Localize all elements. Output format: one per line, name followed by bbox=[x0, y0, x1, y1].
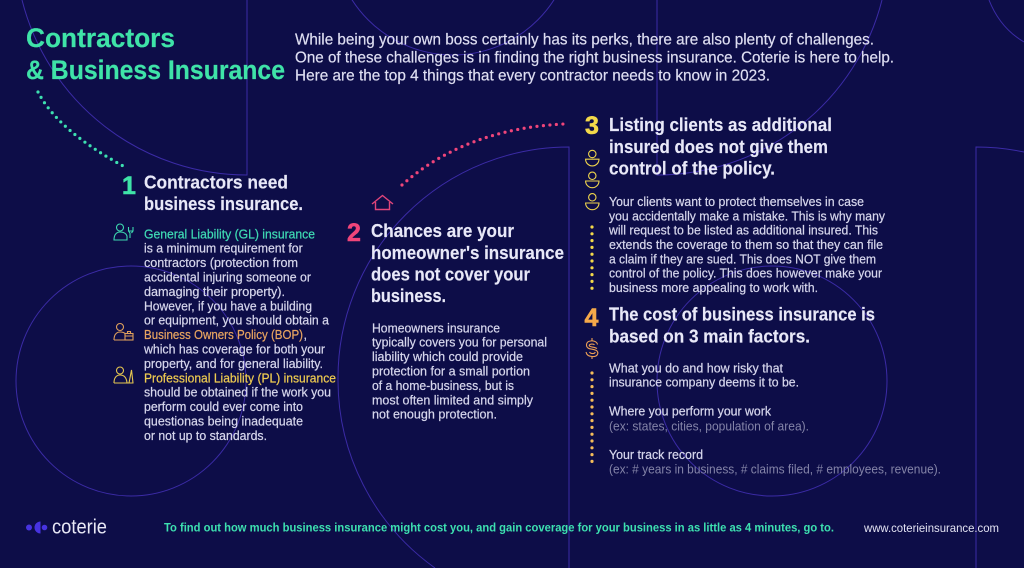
text block: insurance types: accidental injuring someone or bbox=[144, 270, 312, 284]
text block: additional insured: a claim if they are sued. This does NOT give them bbox=[609, 251, 876, 266]
panel: item 4 cost factors bbox=[584, 304, 941, 476]
text block: homeowners insurance: liability which could provide bbox=[372, 349, 523, 364]
number 4: 4 bbox=[584, 304, 598, 332]
title bbox=[26, 23, 285, 85]
heading 4 bbox=[609, 305, 875, 346]
text block: cost factors: (ex: states, cities, population of area). bbox=[609, 418, 809, 433]
heading 1: business insurance. bbox=[144, 194, 303, 214]
text block: insurance types: damaging their property). bbox=[144, 284, 285, 299]
text block: insurance types: questionas being inadequate bbox=[144, 414, 303, 428]
heading 1: Contractors need bbox=[144, 172, 288, 192]
heading 3 bbox=[609, 115, 832, 178]
text block: additional insured: extends the coverage to them so that they can file bbox=[609, 237, 883, 252]
icon: three clients bbox=[586, 150, 599, 210]
icon: logo mark bbox=[26, 522, 47, 534]
text block: cost factors: Where you perform your work bbox=[609, 404, 772, 419]
heading 4: based on 3 main factors. bbox=[609, 326, 810, 346]
icon: business owner person with briefcase bbox=[114, 324, 133, 340]
number 1: 1 bbox=[122, 172, 136, 200]
number 2: 2 bbox=[347, 219, 361, 247]
logo: coterie bbox=[26, 516, 107, 538]
arrow: green dotted line from title to item 1 bbox=[38, 92, 125, 167]
text block: insurance types: However, if you have a building bbox=[144, 298, 312, 313]
heading 3: Listing clients as additional bbox=[609, 115, 832, 135]
text block: additional insured bbox=[608, 194, 886, 295]
heading 1 bbox=[144, 172, 303, 214]
heading 4: The cost of business insurance is bbox=[609, 305, 875, 325]
panel: item 1 contractors need business insurance bbox=[114, 172, 336, 443]
intro text: One of these challenges is in finding the right business insurance. Coterie is here to help. bbox=[295, 50, 894, 66]
text block: additional insured: Your clients want to protect themselves in case bbox=[609, 194, 864, 209]
text block: homeowners insurance: protection for a small portion bbox=[372, 364, 530, 378]
heading 2: business. bbox=[371, 286, 446, 306]
heading 2: homeowner's insurance bbox=[371, 243, 564, 263]
text block: homeowners insurance: not enough protection. bbox=[372, 407, 497, 422]
heading 2 bbox=[371, 221, 564, 306]
yellow dotted line bbox=[590, 227, 594, 289]
text block: additional insured: control of the policy. This does however make your bbox=[609, 266, 883, 281]
number 3: 3 bbox=[585, 112, 599, 140]
footer call to action: To find out how much business insurance might cost you, and gain coverage for your business in as little as 4 minutes, go to. bbox=[164, 520, 834, 534]
text block: additional insured: business more appealing to work with. bbox=[609, 280, 818, 295]
text block: additional insured: you accidentally make a mistake. This is why many bbox=[609, 208, 886, 223]
text block: insurance types: or not up to standards. bbox=[144, 428, 267, 443]
text block: cost factors bbox=[609, 360, 941, 476]
text block: homeowners insurance: of a home-business, but is bbox=[372, 378, 514, 393]
title: & Business Insurance bbox=[26, 55, 285, 85]
title: Contractors bbox=[26, 23, 175, 53]
heading 3: control of the policy. bbox=[609, 158, 775, 178]
website url: www.coterieinsurance.com bbox=[863, 521, 999, 535]
icon: professional person with pencil bbox=[114, 367, 134, 383]
heading 2: Chances are your bbox=[371, 221, 514, 241]
text block: cost factors: (ex: # years in business, # claims filed, # employees, revenue). bbox=[609, 461, 941, 476]
intro text bbox=[295, 32, 894, 84]
panel: item 2 homeowner's insurance bbox=[347, 196, 564, 422]
text block: insurance types: property, and for general liability. bbox=[144, 356, 323, 371]
text block: insurance types: perform could ever come into bbox=[144, 399, 303, 414]
intro text: Here are the top 4 things that every contractor needs to know in 2023. bbox=[295, 68, 770, 84]
arrow: pink dotted line from item 2 to item 3 bbox=[402, 124, 564, 185]
text block: additional insured: will request to be listed as additional insured. This bbox=[608, 223, 878, 238]
text block: insurance types: is a minimum requirement for bbox=[144, 241, 303, 256]
text block: homeowners insurance: most often limited and simply bbox=[372, 392, 534, 407]
text block: insurance types: , bbox=[304, 327, 307, 342]
text block: insurance types: or equipment, you should obtain a bbox=[144, 313, 330, 328]
text block: homeowners insurance bbox=[372, 320, 547, 422]
text block: insurance types: should be obtained if the work you bbox=[144, 385, 331, 400]
icon: house bbox=[372, 196, 393, 210]
text block: insurance types: General Liability (GL) insurance bbox=[144, 226, 315, 241]
text block: insurance types: Professional Liability (PL) insurance bbox=[144, 370, 336, 385]
heading 3: insured does not give them bbox=[609, 137, 828, 157]
text block: insurance types: which has coverage for both your bbox=[143, 342, 326, 356]
heading 2: does not cover your bbox=[371, 264, 530, 284]
panel: item 3 additional insured bbox=[585, 112, 886, 295]
text block: homeowners insurance: Homeowners insurance bbox=[372, 320, 500, 335]
intro text: While being your own boss certainly has its perks, there are also plenty of challenges. bbox=[295, 32, 874, 48]
text block: homeowners insurance: typically covers you for personal bbox=[372, 335, 547, 350]
text block: cost factors: What you do and how risky that bbox=[609, 360, 783, 375]
text block: cost factors: insurance company deems it to be. bbox=[609, 375, 799, 390]
text block: insurance types: Business Owners Policy (BOP) bbox=[144, 327, 303, 342]
text block: cost factors: Your track record bbox=[609, 447, 703, 462]
orange dotted line bbox=[590, 373, 594, 468]
text block: insurance types bbox=[143, 226, 336, 443]
icon: dollar sign bbox=[586, 338, 598, 359]
logo: coterie: coterie bbox=[52, 516, 107, 538]
icon: general liability person with wrench bbox=[114, 224, 133, 240]
text block: insurance types: contractors (protection from bbox=[144, 255, 298, 270]
